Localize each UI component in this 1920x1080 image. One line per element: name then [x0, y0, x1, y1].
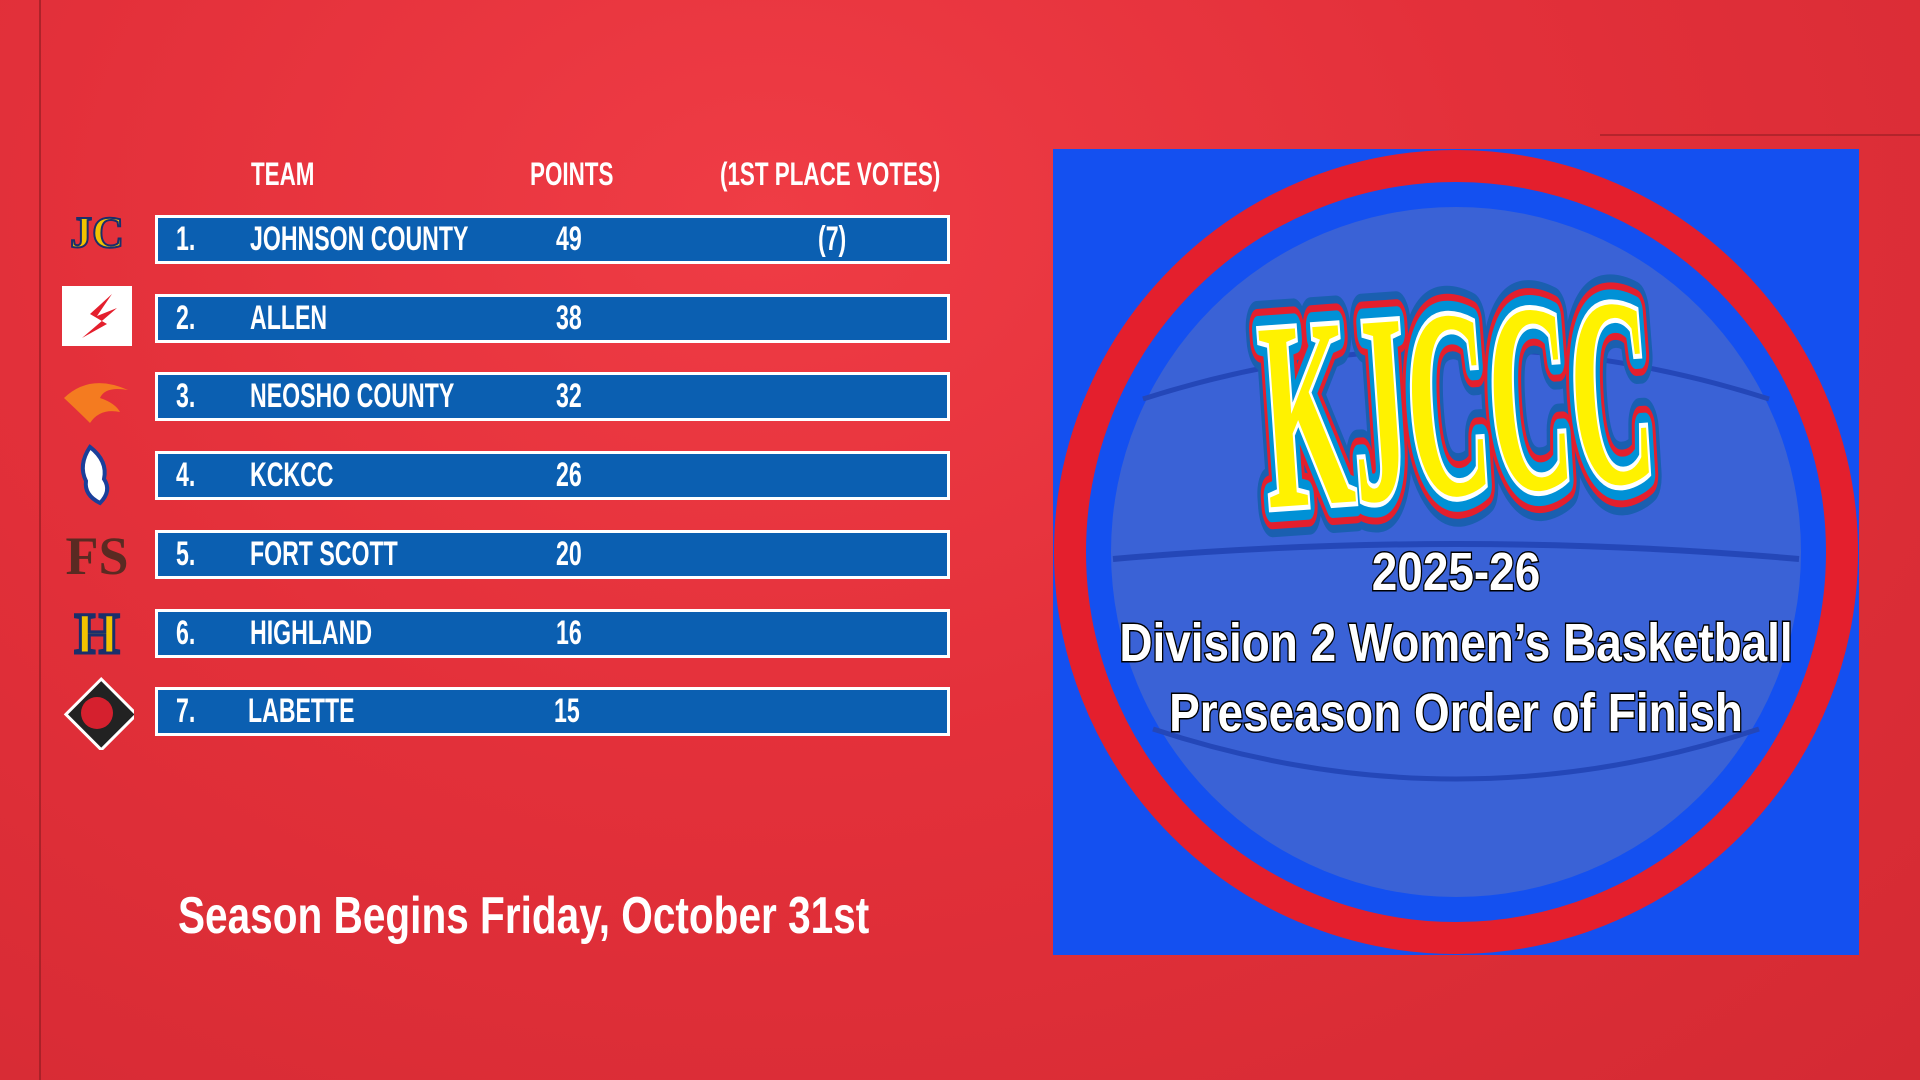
row 2	[155, 294, 950, 343]
row 5	[155, 530, 950, 579]
row 3	[155, 372, 950, 421]
header: points: POINTS	[530, 156, 613, 192]
row 4	[155, 451, 950, 500]
row 2: 38	[556, 299, 582, 337]
icon: kckcc logo	[80, 444, 110, 506]
header: votes: (1ST PLACE VOTES)	[720, 156, 940, 192]
title text: Division 2 Women’s Basketball	[1119, 613, 1793, 673]
row 3: NEOSHO COUNTY	[250, 377, 454, 415]
row 5: 20	[556, 535, 582, 573]
title text	[1119, 542, 1793, 743]
icon: allen logo	[62, 286, 132, 346]
row 1: JOHNSON COUNTY	[250, 220, 468, 258]
row 4: KCKCC	[250, 456, 333, 494]
row 1: (7)	[818, 220, 846, 258]
logo: kjccc: KJCCC	[1252, 240, 1663, 566]
row 6: HIGHLAND	[250, 614, 372, 652]
row 4: 4.	[176, 456, 195, 494]
row 7	[155, 687, 950, 736]
row 1	[155, 215, 950, 264]
icon: johnson county logo: JC	[70, 208, 124, 257]
row 4: 26	[556, 456, 582, 494]
title text: Preseason Order of Finish	[1169, 683, 1743, 743]
icon: highland logo: H	[74, 601, 120, 666]
logo: kjccc: KJCCC	[1252, 240, 1663, 566]
row 3: 3.	[176, 377, 195, 415]
row 5: 5.	[176, 535, 195, 573]
row 1: 49	[556, 220, 582, 258]
row 7: LABETTE	[248, 692, 355, 730]
logo: kjccc: KJCCC	[1252, 240, 1663, 566]
icon: fort scott logo: FS	[65, 526, 129, 586]
row 1: 1.	[176, 220, 195, 258]
title text: 2025-26	[1372, 542, 1540, 602]
row 6: 6.	[176, 614, 195, 652]
row 2: 2.	[176, 299, 195, 337]
row 5: FORT SCOTT	[250, 535, 398, 573]
footer text: Season Begins Friday, October 31st	[178, 887, 869, 945]
icon: neosho logo	[64, 383, 128, 423]
basketball	[1111, 207, 1801, 897]
row 6	[155, 609, 950, 658]
row 7: 15	[554, 692, 580, 730]
row 6: 16	[556, 614, 582, 652]
row 7: 7.	[176, 692, 195, 730]
row 2: ALLEN	[250, 299, 327, 337]
header: team: TEAM	[251, 156, 314, 192]
row 3: 32	[556, 377, 582, 415]
icon: labette logo	[64, 677, 134, 750]
ring	[1070, 166, 1842, 938]
logo: kjccc: KJCCC	[1252, 240, 1663, 566]
panel: kjccc graphic	[1053, 149, 1859, 955]
